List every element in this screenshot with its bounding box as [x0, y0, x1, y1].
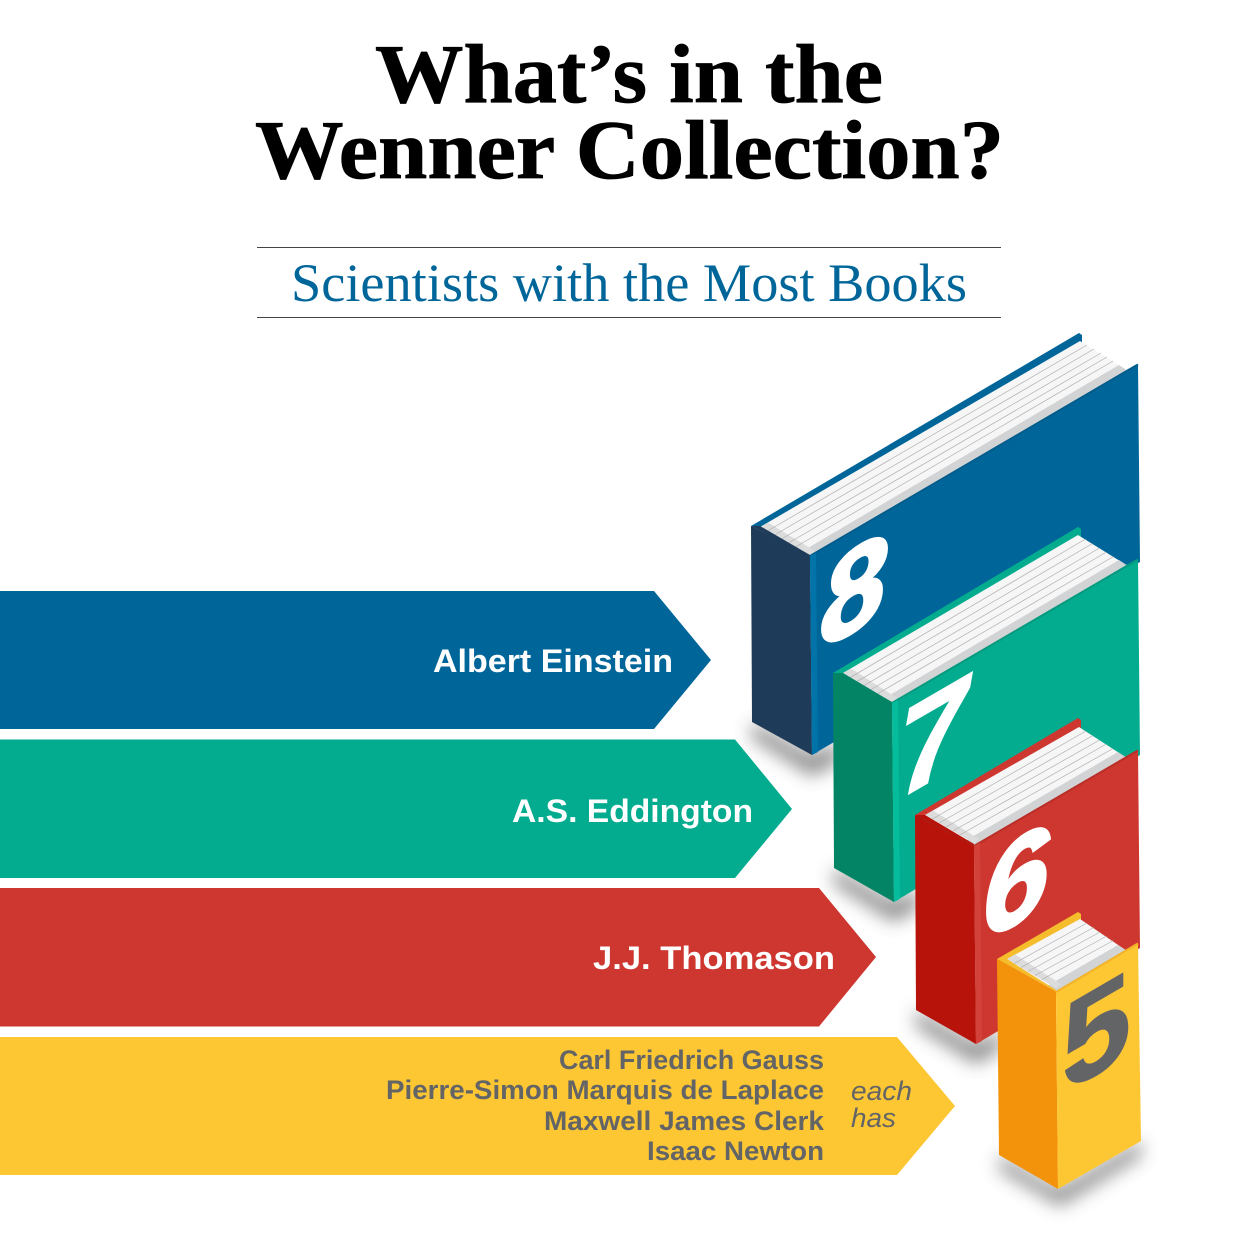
book: 5 (yellow): 5 [1062, 943, 1131, 1121]
title: What’s in the [375, 28, 883, 121]
book: 8 (blue): 8 [821, 506, 887, 676]
arrow: Albert Einstein [0, 591, 711, 729]
arrow: J.J. Thomason: J.J. Thomason [593, 940, 835, 976]
book: 7 (green): 7 [899, 647, 972, 825]
arrow: J.J. Thomason [0, 888, 876, 1026]
arrow: four scientists with five books each [0, 1037, 955, 1175]
book: 6 (red): 6 [982, 797, 1050, 969]
arrow: four scientists with five books each: Pierre-Simon Marquis de Laplace [386, 1075, 824, 1105]
book shadows [752, 722, 1141, 1206]
book: 6 (red) [915, 718, 1140, 1044]
title: Wenner Collection? [255, 104, 1004, 197]
arrow: four scientists with five books each: Maxwell James Clerk [544, 1106, 824, 1136]
arrow: A.S. Eddington [0, 740, 792, 878]
book: 8 (blue) [751, 333, 1140, 755]
book: 7 (green) [833, 527, 1140, 902]
arrow: Albert Einstein: Albert Einstein [433, 643, 673, 679]
arrow: four scientists with five books each: has [851, 1103, 896, 1133]
arrow: four scientists with five books each: each [851, 1076, 912, 1106]
arrow: four scientists with five books each: Carl Friedrich Gauss [559, 1045, 824, 1075]
arrow: four scientists with five books each: Isaac Newton [647, 1136, 824, 1166]
subtitle: Scientists with the Most Books [291, 253, 967, 313]
arrow: A.S. Eddington: A.S. Eddington [512, 793, 753, 829]
title [255, 28, 1004, 197]
book: 5 (yellow) [997, 912, 1141, 1189]
